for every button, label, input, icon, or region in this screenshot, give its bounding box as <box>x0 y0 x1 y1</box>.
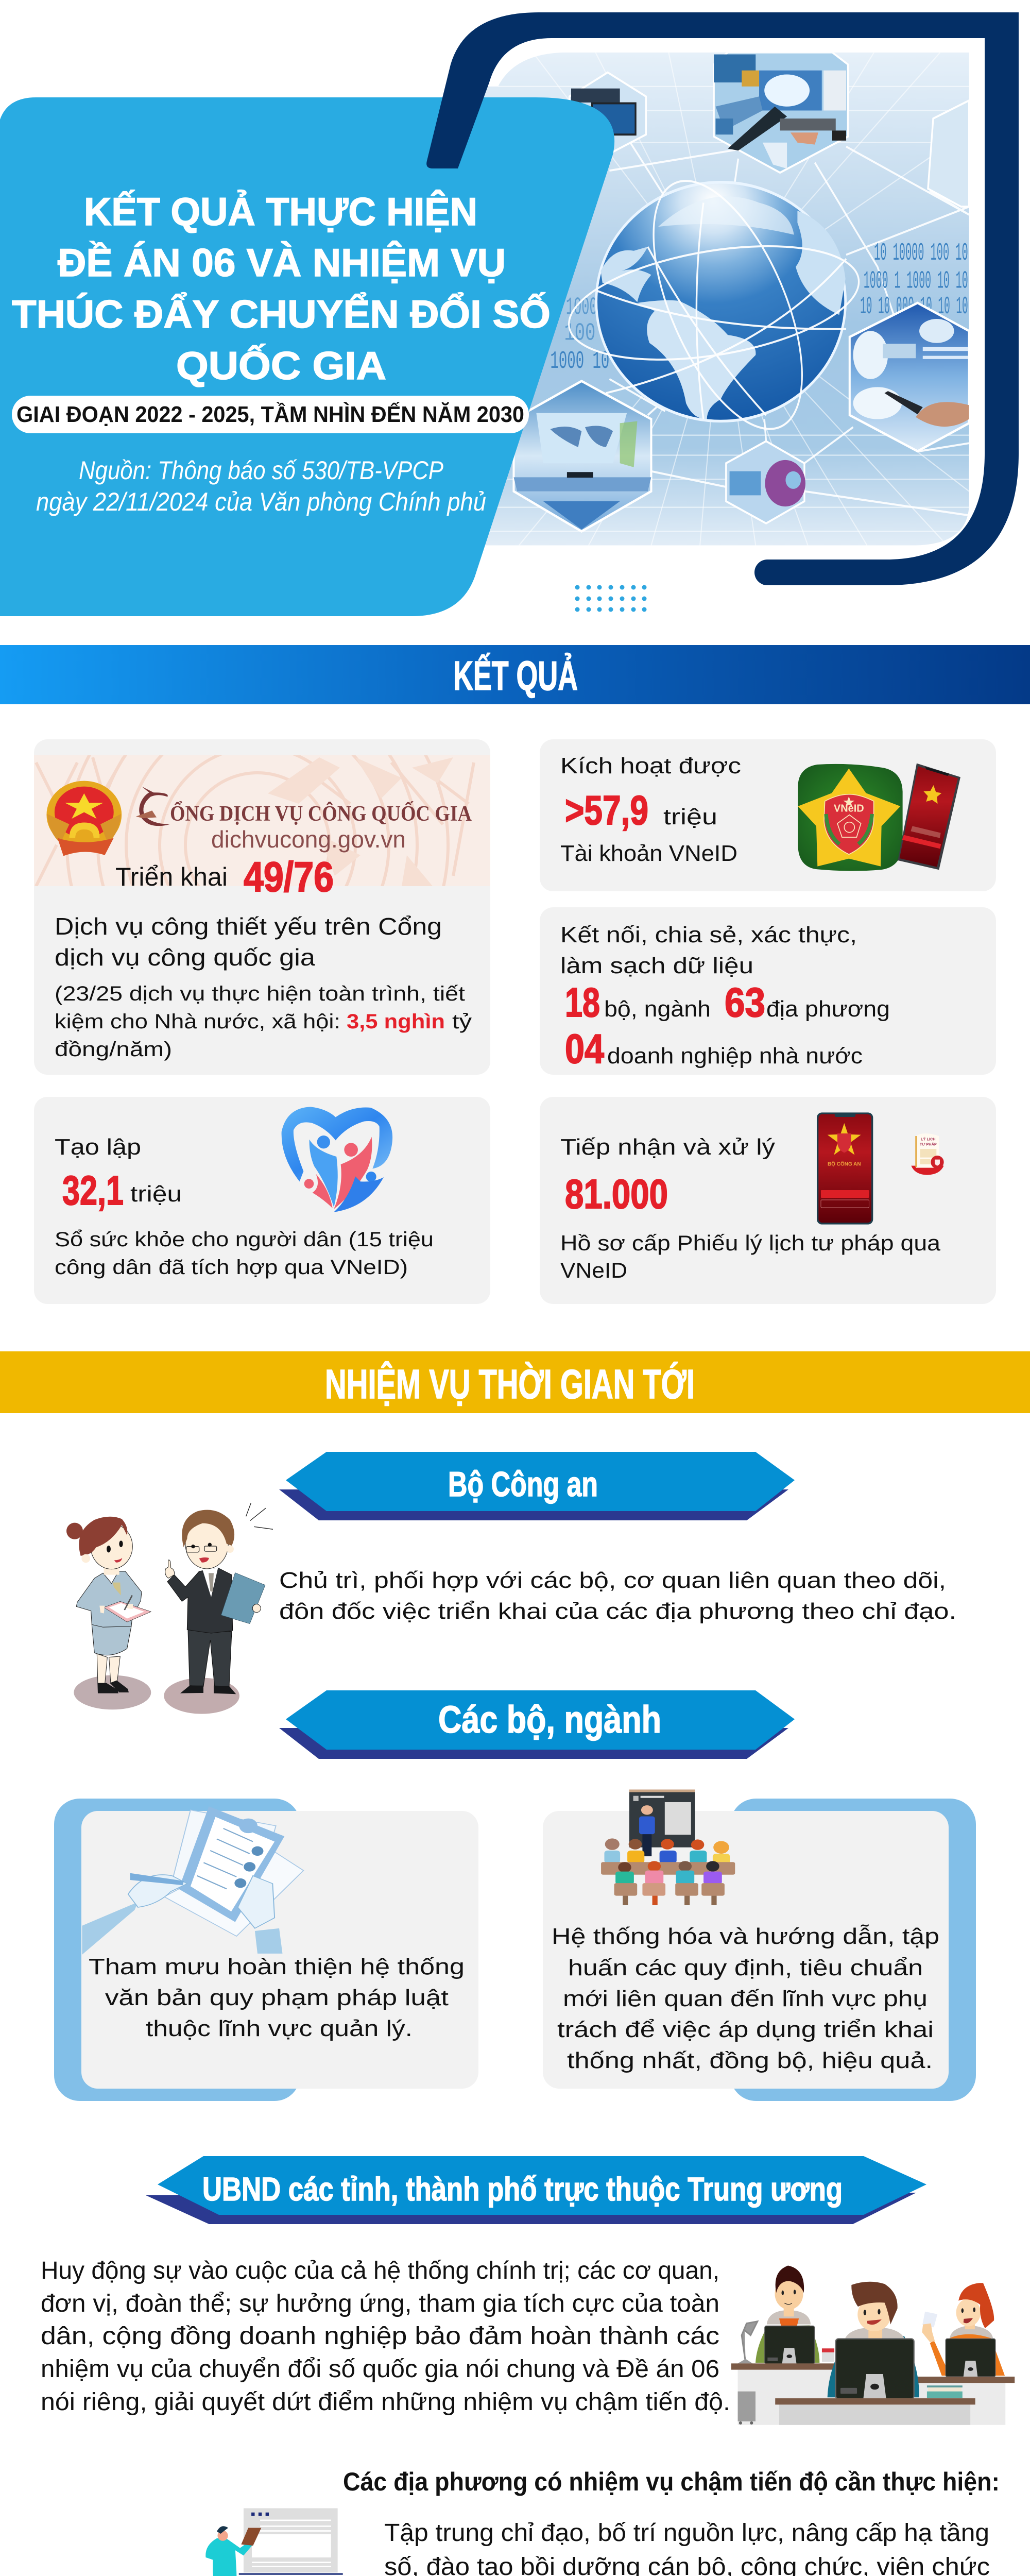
text: data connections: 04 <box>565 1026 604 1072</box>
text: legal documents: Tham mưu hoàn thiện hệ thống <box>89 1954 465 1979</box>
subtitle pill: GIAI ĐOẠN 2022 - 2025, TẦM NHÌN ĐẾN NĂM 2030 <box>16 401 524 427</box>
ribbon heading: ministries: Các bộ, ngành <box>438 1698 661 1741</box>
text: provincial committee tasks: dân, cộng đồng doanh nghiệp bảo đảm hoàn thành các <box>41 2323 719 2350</box>
hero image: globe network: 1000 <box>566 293 597 322</box>
hex tile: media collage <box>714 53 848 173</box>
text: VNeID accounts: Tài khoản VNeID <box>560 841 737 866</box>
icon: VNeID app: VNeID <box>834 803 864 815</box>
text: health records: triệu <box>130 1181 182 1207</box>
portal description: 3,5 nghìn <box>347 1010 445 1033</box>
portal description: tỷ <box>452 1010 472 1033</box>
panel: legal documents task <box>54 1799 478 2101</box>
text: data connections: Kết nối, chia sẻ, xác thực, <box>560 922 857 947</box>
text: judicial record: Tiếp nhận và xử lý <box>560 1134 775 1160</box>
title <box>12 190 551 388</box>
stat: 49/76 <box>115 854 334 901</box>
hero frame <box>426 12 1019 585</box>
text: VNeID accounts: Kích hoạt được <box>560 753 741 778</box>
text: focused direction: Tập trung chỉ đạo, bố trí nguồn lực, nâng cấp hạ tầng <box>384 2519 989 2547</box>
ribbon heading: provincial committees <box>146 2156 926 2224</box>
illustration: presenter and audience <box>196 2508 376 2576</box>
text: data connections: địa phương <box>766 996 890 1022</box>
portal description: Dịch vụ công thiết yếu trên Cổng <box>55 913 442 940</box>
hex tile: building <box>928 100 969 207</box>
title: THÚC ĐẨY CHUYỂN ĐỔI SỐ <box>12 292 551 336</box>
illustration: office workers <box>731 2266 1015 2425</box>
ribbon heading: ministries <box>279 1690 795 1759</box>
text: judicial record: VNeID <box>560 1258 627 1282</box>
portal description: dịch vụ công quốc gia <box>55 944 315 971</box>
icon: phone app and document: BỘ CÔNG AN <box>828 1161 861 1167</box>
text: legal documents: thuộc lĩnh vực quản lý. <box>146 2016 413 2041</box>
section heading: upcoming tasks <box>0 1351 1030 1413</box>
text: Ministry of Public Security tasks <box>279 1568 956 1624</box>
icon: heart family <box>282 1107 392 1212</box>
section heading: results: KẾT QUẢ <box>453 653 578 699</box>
icon: clipboard and hands <box>82 1806 303 1955</box>
stat: 49/76: 49/76 <box>244 854 334 901</box>
portal description: đồng/năm) <box>55 1038 172 1061</box>
banner: portal <box>34 654 490 1036</box>
panel: health records <box>34 1097 490 1304</box>
text: data connections: doanh nghiệp nhà nước <box>607 1043 863 1069</box>
text: data connections: 18 <box>565 979 600 1025</box>
text: health records: Sổ sức khỏe cho người dân (15 triệu <box>55 1228 434 1251</box>
panel: public service portal <box>34 654 490 1075</box>
icon: phone app and document: TƯ PHÁP <box>920 1142 937 1146</box>
text: training: trách để việc áp dụng triển khai <box>557 2017 934 2042</box>
source note <box>36 456 486 516</box>
text: data connections <box>560 922 890 1072</box>
text: health records: công dân đã tích hợp qua VNeID) <box>55 1256 408 1279</box>
globe <box>563 155 865 455</box>
subheading: slow provinces: Các địa phương có nhiệm vụ chậm tiến độ cần thực hiện: <box>343 2467 1000 2496</box>
icon: national emblem <box>46 781 122 856</box>
icon: phone app and document <box>817 1112 944 1225</box>
icon: phone app and document: LÝ LỊCH <box>921 1137 936 1141</box>
text: focused direction <box>384 2519 990 2576</box>
text: legal documents <box>89 1954 465 2041</box>
portal url: dichvucong.gov.vn <box>211 826 406 853</box>
illustration: two officials <box>66 1503 273 1714</box>
hero image: globe network <box>463 53 971 546</box>
title: ĐỀ ÁN 06 VÀ NHIỆM VỤ <box>58 241 506 285</box>
text: training <box>552 1924 939 2073</box>
text: health records: Tạo lập <box>55 1134 141 1160</box>
text: VNeID accounts: triệu <box>663 804 717 829</box>
text: VNeID accounts <box>560 753 741 866</box>
text: provincial committee tasks: nói riêng, giải quyết dứt điểm những nhiệm vụ chậm tiến độ. <box>41 2388 730 2416</box>
text: judicial record: Hồ sơ cấp Phiếu lý lịch tư pháp qua <box>560 1231 941 1255</box>
text: health records <box>55 1134 434 1279</box>
text: training: mới liên quan đến lĩnh vực phụ <box>563 1986 928 2011</box>
hero image: globe network: 1000 10 <box>550 347 609 376</box>
text: judicial record: 81.000 <box>565 1171 668 1217</box>
text: Ministry of Public Security tasks: đôn đốc việc triển khai của các địa phương theo chỉ đạo. <box>279 1599 956 1624</box>
text: provincial committee tasks: Huy động sự vào cuộc của cả hệ thống chính trị; các cơ quan, <box>41 2257 719 2284</box>
text: Ministry of Public Security tasks: Chủ trì, phối hợp với các bộ, cơ quan liên quan theo dõi, <box>279 1568 946 1593</box>
ribbon heading: Ministry of Public Security: Bộ Công an <box>448 1465 598 1504</box>
title: QUỐC GIA <box>176 344 386 388</box>
panel: hero title background <box>0 97 614 616</box>
panel: VNeID accounts <box>540 739 996 891</box>
text: data connections: làm sạch dữ liệu <box>560 953 753 978</box>
text: training: Hệ thống hóa và hướng dẫn, tập <box>552 1924 939 1949</box>
ribbon heading: Ministry of Public Security <box>279 1452 795 1520</box>
hex tile: servers <box>570 73 646 155</box>
source note: Nguồn: Thông báo số 530/TB-VPCP <box>79 456 444 485</box>
title: KẾT QUẢ THỰC HIỆN <box>84 190 477 234</box>
text: data connections: 63 <box>725 979 765 1025</box>
text: training: thống nhất, đồng bộ, hiệu quả. <box>567 2048 933 2073</box>
text: legal documents: văn bản quy phạm pháp luật <box>105 1985 449 2010</box>
decoration: dot grid <box>575 585 647 612</box>
stat: 49/76: Triển khai <box>115 862 228 891</box>
hex tile: cloud and phone <box>850 303 969 451</box>
portal description: kiệm cho Nhà nước, xã hội: <box>55 1010 340 1033</box>
portal description <box>55 913 472 1061</box>
text: judicial record <box>560 1134 941 1282</box>
text: health records: 32,1 <box>62 1167 124 1213</box>
section heading: upcoming tasks: NHIỆM VỤ THỜI GIAN TỚI <box>325 1361 695 1407</box>
panel: data connections <box>540 907 996 1075</box>
text: data connections: bộ, ngành <box>604 996 711 1022</box>
text: VNeID accounts: >57,9 <box>565 787 648 833</box>
text: provincial committee tasks: đơn vị, đoàn thể; sự hưởng ứng, tham gia tích cực của toàn <box>41 2290 719 2317</box>
portal description: (23/25 dịch vụ thực hiện toàn trình, tiết <box>55 982 465 1005</box>
hero image: globe network: 100 <box>564 319 595 347</box>
icon: VNeID app <box>798 764 960 871</box>
text: training: huấn các quy định, tiêu chuẩn <box>568 1955 923 1980</box>
phone <box>898 764 960 870</box>
icon: crane letter C <box>136 787 170 826</box>
portal name: ỔNG DỊCH VỤ CÔNG QUỐC GIA <box>170 801 472 826</box>
panel: training task <box>543 1789 976 2101</box>
section heading: results <box>0 645 1030 704</box>
subtitle pill <box>12 396 529 433</box>
panel: judicial record <box>540 1097 996 1304</box>
icon: classroom <box>601 1789 735 1905</box>
ribbon heading: provincial committees: UBND các tỉnh, thành phố trực thuộc Trung ương <box>202 2171 843 2208</box>
hex tile: laptop map <box>513 381 651 531</box>
text: provincial committee tasks: nhiệm vụ của chuyển đổi số quốc gia nói chung và Đề án 06 <box>41 2355 719 2383</box>
source note: ngày 22/11/2024 của Văn phòng Chính phủ <box>36 487 486 516</box>
text: provincial committee tasks <box>41 2257 730 2416</box>
hex tile: disc <box>726 441 805 523</box>
